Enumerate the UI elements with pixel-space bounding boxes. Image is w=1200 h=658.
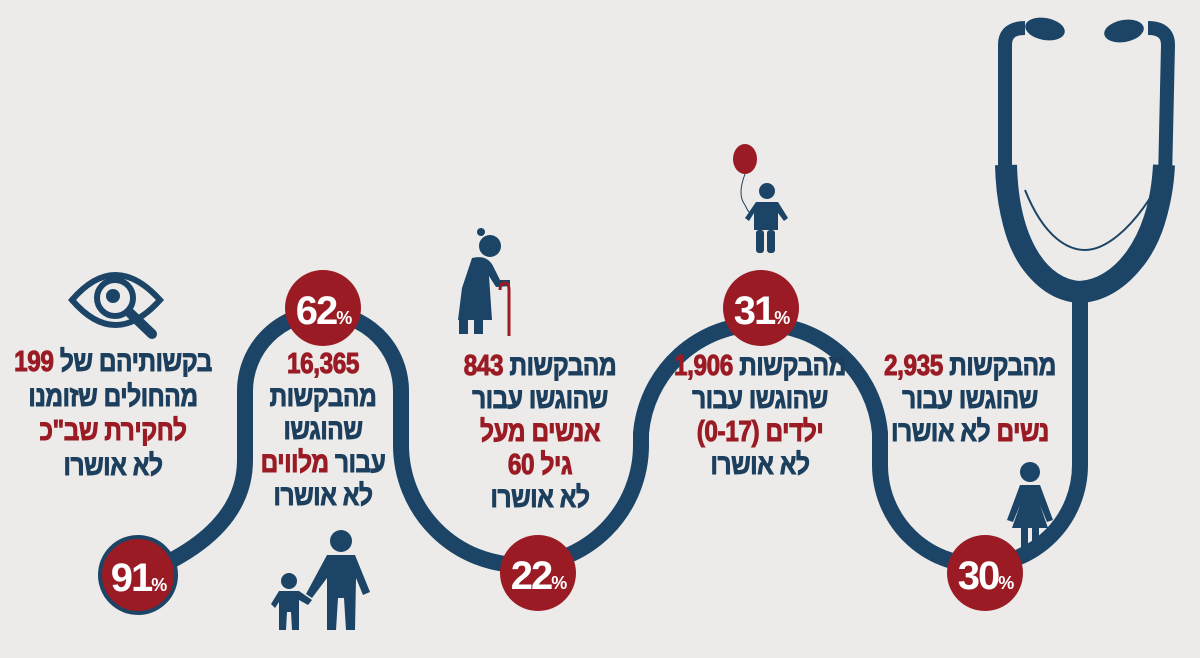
text: 843 over 60: לא אושרו [491, 482, 589, 514]
icon: child with balloon [733, 144, 788, 253]
text: 843 over 60: אנשים מעל [480, 416, 600, 448]
icon: eye with magnifier [72, 275, 160, 334]
text: 1,906 children: שהוגשו עבור [692, 383, 828, 415]
text: 2,935 women: נשים לא אושרו [891, 416, 1049, 448]
text: 199 Shin Bet: לחקירת שב"כ [40, 415, 186, 447]
icon: woman [1007, 462, 1053, 550]
text: 199 Shin Bet [14, 346, 212, 482]
circle 62%: 62% [296, 289, 352, 333]
icon: adult with child [271, 530, 370, 630]
text: 16,365 escorts [261, 348, 385, 512]
text: 843 over 60: גיל 60 [508, 449, 572, 481]
text: 199 Shin Bet: בקשותיהם של 199 [14, 346, 212, 378]
circle 91% [100, 537, 176, 613]
circle 62% [285, 270, 361, 346]
text: 2,935 women [884, 350, 1056, 448]
circle 22%: 22% [511, 554, 567, 598]
text: 1,906 children [674, 350, 846, 481]
text: 1,906 children: ילדים (0-17) [697, 416, 823, 448]
text: 1,906 children: מהבקשות 1,906 [674, 350, 846, 382]
text: 16,365 escorts: שהוגשו [283, 414, 363, 446]
circle 30% [947, 535, 1023, 611]
text: 16,365 escorts: עבור מלווים [261, 447, 385, 479]
circle 30%: 30% [958, 554, 1014, 598]
text: 199 Shin Bet: לא אושרו [64, 450, 162, 482]
text: 2,935 women: שהוגשו עבור [902, 383, 1038, 415]
wavy timeline line [140, 290, 1080, 575]
icon: elderly woman with cane [458, 228, 510, 336]
text: 2,935 women: מהבקשות 2,935 [884, 350, 1056, 382]
text: 16,365 escorts: מהבקשות [270, 381, 376, 413]
circle 31% [723, 270, 799, 346]
text: 16,365 escorts: 16,365 [287, 348, 359, 380]
text: 199 Shin Bet: מהחולים שזומנו [28, 380, 198, 412]
stethoscope [1005, 15, 1168, 295]
text: 1,906 children: לא אושרו [711, 449, 809, 481]
text: 843 over 60: מהבקשות 843 [464, 350, 616, 382]
circle 91%: 91% [111, 556, 167, 600]
circle 31%: 31% [734, 289, 790, 333]
text: 843 over 60 [464, 350, 616, 514]
circle 22% [500, 535, 576, 611]
text: 843 over 60: שהוגשו עבור [472, 383, 608, 415]
text: 16,365 escorts: לא אושרו [274, 480, 372, 512]
